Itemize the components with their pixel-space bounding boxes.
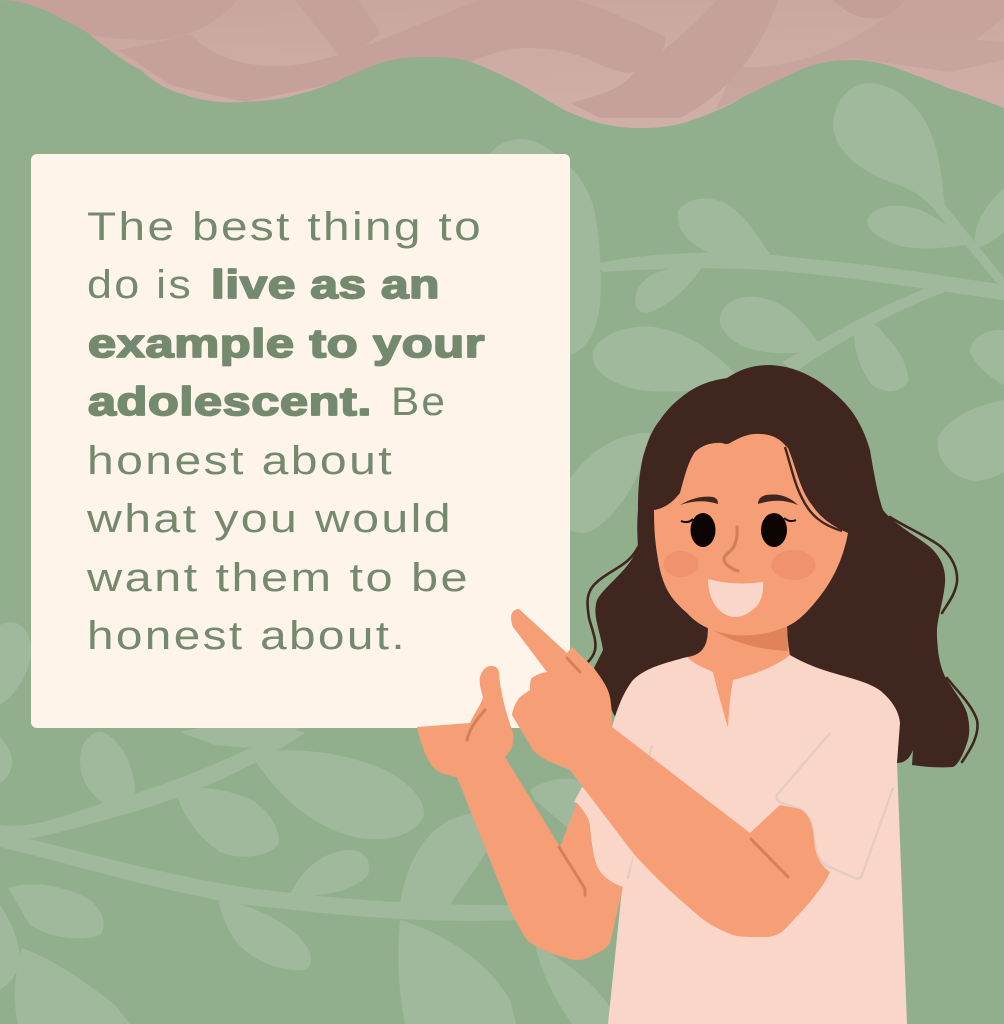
shirt seam: front sleeve bbox=[777, 733, 893, 879]
text block: quote: The best thing to bbox=[87, 205, 483, 249]
right eye bbox=[761, 513, 787, 547]
hair strand: left bbox=[587, 547, 638, 663]
left eye bbox=[690, 513, 716, 547]
text block: quote: honest about. bbox=[87, 614, 407, 658]
text block: quote: example to your bbox=[88, 322, 485, 366]
hair strand: lower right bbox=[947, 678, 978, 762]
skin fold: pointing finger bbox=[567, 658, 580, 672]
face bbox=[654, 434, 848, 635]
neck shadow bbox=[708, 625, 788, 651]
text block: quote: live as an bbox=[211, 263, 440, 307]
left cheek bbox=[664, 551, 698, 577]
text block: quote: do is bbox=[87, 263, 193, 307]
left sleeve bbox=[574, 787, 635, 887]
skin fold: back thumb bbox=[467, 710, 485, 740]
panel: cream quote card bbox=[31, 154, 570, 728]
front arm and pointing hand bbox=[511, 609, 830, 937]
illustration: smiling woman pointing at card bbox=[417, 365, 978, 1024]
neck bbox=[687, 620, 790, 728]
left eyebrow bbox=[680, 497, 718, 505]
panel: pink wavy top band bbox=[0, 0, 1004, 135]
hair strand on forehead bbox=[785, 447, 842, 531]
text block: quote: Be bbox=[391, 380, 447, 424]
back arm and hand bbox=[417, 666, 623, 960]
skin fold: back elbow bbox=[559, 847, 585, 895]
text block: quote bbox=[86, 205, 485, 658]
hair strand: upper right bbox=[890, 517, 957, 613]
nose bbox=[724, 527, 738, 571]
shirt seam: left low bbox=[628, 853, 633, 879]
hair bbox=[593, 365, 969, 800]
right eyebrow bbox=[758, 494, 798, 505]
shirt seam: left short bbox=[649, 745, 652, 757]
right lashes bbox=[784, 518, 796, 521]
right cheek bbox=[772, 550, 816, 580]
text block: quote: want them to be bbox=[86, 556, 470, 600]
text block: quote: what you would bbox=[86, 497, 453, 541]
left lashes bbox=[681, 519, 693, 522]
shirt bbox=[608, 655, 907, 1024]
mouth bbox=[708, 579, 763, 617]
text block: quote: adolescent. bbox=[88, 380, 372, 424]
text block: quote: honest about bbox=[87, 439, 394, 483]
skin fold: front elbow bbox=[751, 839, 788, 877]
